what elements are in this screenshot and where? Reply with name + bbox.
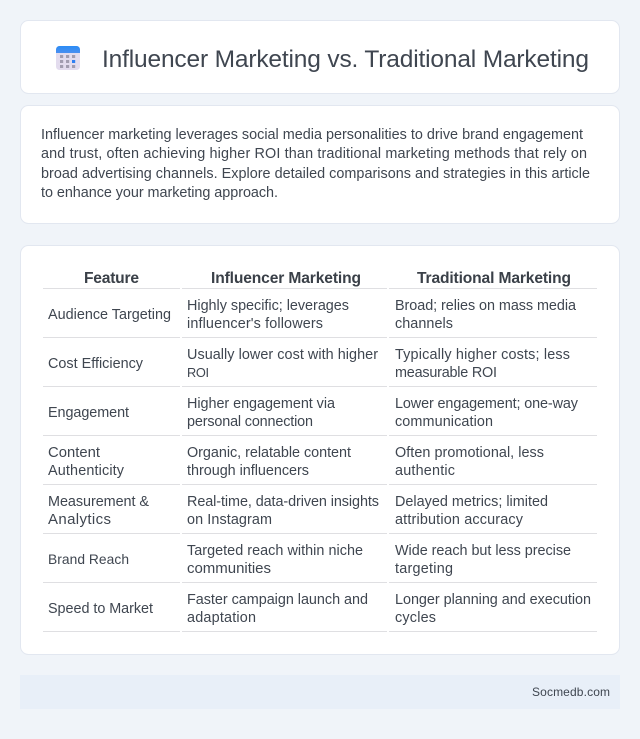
row: engagement: Higher engagement via	[187, 396, 335, 412]
row: audience targeting	[48, 298, 576, 332]
row: speed to market: adaptation	[187, 610, 256, 626]
row: speed to market: Faster campaign launch and	[187, 592, 368, 608]
row: cost efficiency: Usually lower cost with higher	[187, 347, 378, 363]
icon: calendar	[56, 46, 80, 70]
row: cost efficiency: measurable ROI	[395, 365, 497, 381]
row: brand reach: communities	[187, 560, 271, 577]
row: audience targeting: influencer's followers	[187, 316, 323, 332]
row: measurement and analytics: Real-time, data-driven insights	[187, 494, 379, 510]
row: engagement	[48, 396, 579, 430]
row: cost efficiency: Cost Efficiency	[48, 356, 144, 372]
intro text	[41, 127, 590, 201]
row: speed to market: cycles	[395, 610, 436, 626]
row: brand reach: Targeted reach within niche	[187, 543, 363, 559]
row: content authenticity: Authenticity	[48, 463, 125, 479]
row: content authenticity: Often promotional, less	[395, 445, 544, 461]
row: content authenticity: Organic, relatable content	[187, 445, 351, 461]
row: cost efficiency	[48, 347, 570, 381]
row: audience targeting: Audience Targeting	[48, 307, 171, 323]
intro text: broad advertising channels. Explore detailed comparisons and strategies in this article	[41, 166, 590, 182]
panel: comparison table	[20, 246, 620, 654]
row: measurement and analytics	[48, 494, 548, 528]
table header row: Traditional Marketing	[417, 270, 571, 287]
row: measurement and analytics: Delayed metrics; limited	[395, 494, 548, 510]
row: engagement: communication	[395, 414, 493, 430]
row: engagement: Engagement	[48, 405, 129, 421]
row: measurement and analytics: Analytics	[48, 511, 111, 528]
row: content authenticity	[48, 445, 544, 479]
row: audience targeting: channels	[395, 316, 453, 332]
footer source text: Socmedb.com	[532, 685, 610, 699]
row: brand reach: Wide reach but less precise	[395, 543, 571, 559]
row: measurement and analytics: on Instagram	[187, 512, 272, 528]
row: content authenticity: through influencers	[187, 463, 309, 479]
row: speed to market	[48, 592, 591, 626]
row: cost efficiency: Typically higher costs; less	[395, 347, 570, 363]
row: brand reach: Brand Reach	[48, 552, 129, 567]
row: measurement and analytics: Measurement &	[48, 494, 149, 510]
table header row: Influencer Marketing	[211, 270, 361, 287]
intro text: and trust, often achieving higher ROI than traditional marketing methods that rely on	[41, 146, 587, 162]
panel: title header	[20, 20, 620, 94]
row: brand reach: targeting	[395, 561, 453, 577]
row: content authenticity: Content	[48, 445, 100, 461]
row: cost efficiency: ROI	[187, 365, 209, 380]
panel: introduction	[20, 106, 620, 224]
table header row	[84, 270, 571, 287]
row: speed to market: Longer planning and execution	[395, 592, 591, 608]
row: audience targeting: Broad; relies on mass media	[395, 298, 576, 314]
row: measurement and analytics: attribution accuracy	[395, 512, 524, 528]
intro text: Influencer marketing leverages social media personalities to drive brand engagement	[41, 127, 583, 143]
title: Influencer Marketing vs. Traditional Marketing	[102, 46, 589, 73]
row: engagement: Lower engagement; one-way	[395, 396, 579, 412]
footer bar	[20, 675, 620, 709]
table header row: Feature	[84, 270, 139, 287]
row: speed to market: Speed to Market	[48, 601, 153, 617]
row: brand reach	[48, 543, 571, 577]
row: engagement: personal connection	[187, 414, 313, 430]
intro text: to enhance your marketing approach.	[41, 185, 278, 201]
row: audience targeting: Highly specific; leverages	[187, 298, 349, 314]
row: content authenticity: authentic	[395, 463, 455, 479]
